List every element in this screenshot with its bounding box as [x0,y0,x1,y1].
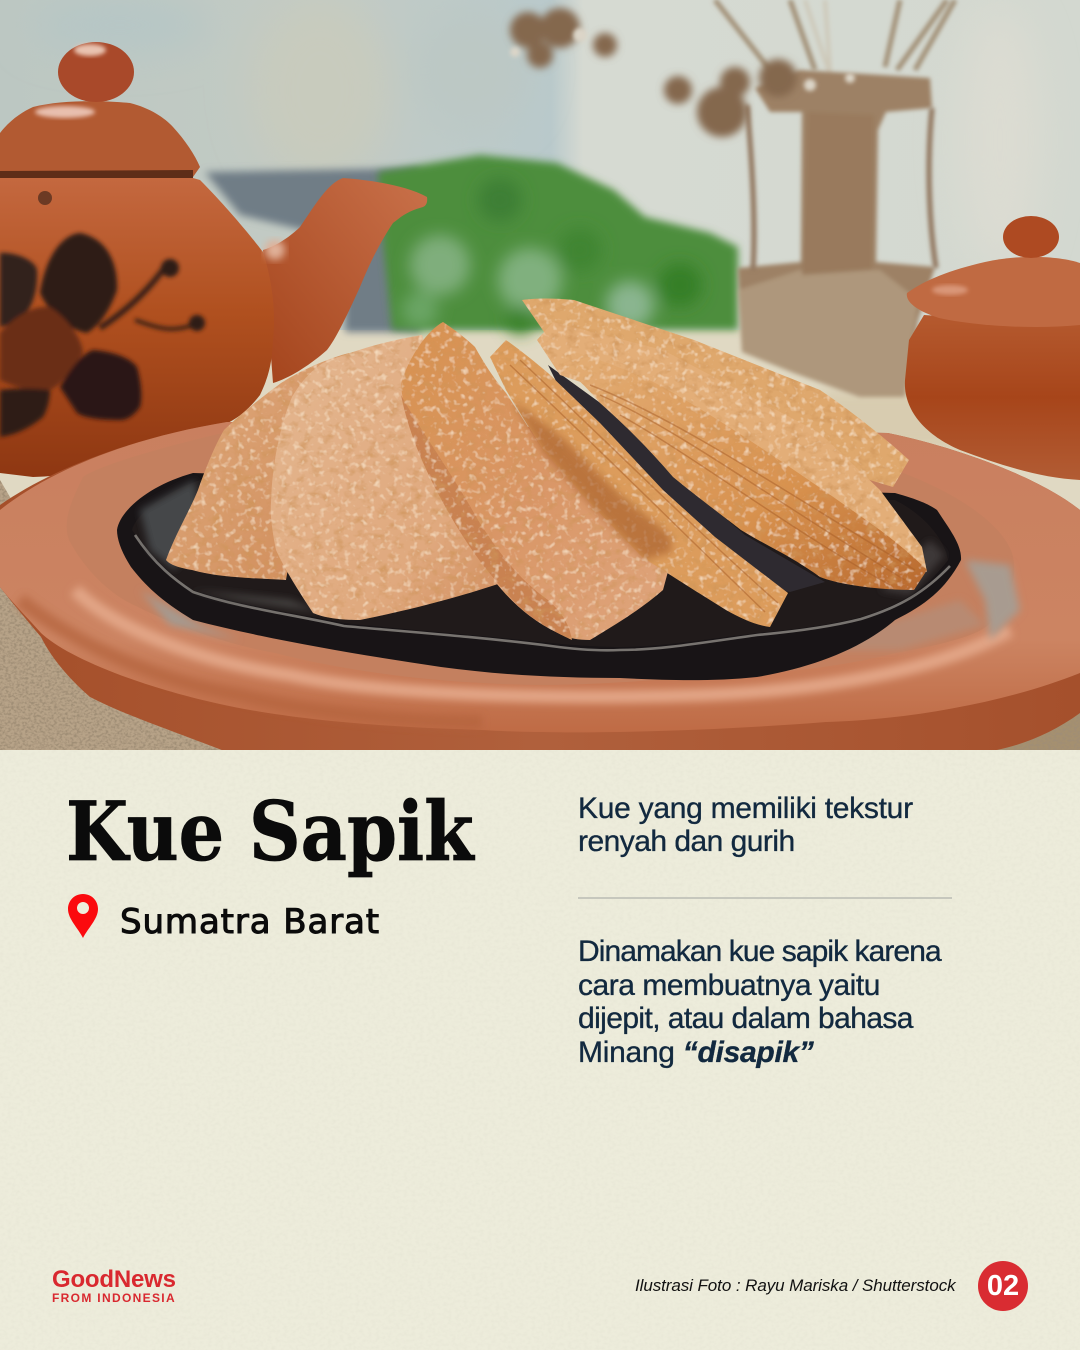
description two: cara membuatnya yaitu [578,969,880,1002]
page number badge: 02 [987,1270,1019,1302]
description one [578,792,913,858]
photo credit: Ilustrasi Foto : Rayu Mariska / Shutterstock [635,1276,956,1295]
shadow under pastries [548,365,825,592]
back pastry [522,298,909,487]
divider [578,897,952,899]
second back pastry [537,322,927,572]
pastry layer lines [510,360,915,612]
burlap cloth [0,480,1080,750]
folded strip [401,395,572,640]
layered pastry right [558,350,927,590]
jar with lid on the right [905,216,1080,480]
black dish [117,473,961,680]
woven vase with dried flowers [510,0,955,397]
layered pastry front [490,340,788,627]
photo: kue sapik on terracotta plate with teapot [0,0,1080,750]
large left pastry [271,335,501,620]
background wall [0,0,1080,750]
description two: dijepit, atau dalam bahasa [578,1002,913,1035]
dark stone behind plant [205,168,420,332]
description two: Minang “disapik” [578,1036,814,1069]
shade beside folded pastry [512,400,672,560]
paper grain [0,750,1080,1350]
teapot [0,42,427,477]
teapot flower motif [0,233,205,437]
description two: Dinamakan kue sapik karena [578,935,941,968]
green plant [378,155,738,334]
central folded pastry [401,322,673,640]
far left pastry [166,353,349,580]
terracotta plate [0,422,1080,752]
description one: Kue yang memiliki tekstur [578,792,913,825]
page number badge [978,1261,1028,1311]
description one: renyah dan gurih [578,825,795,858]
location label: Sumatra Barat [120,902,380,942]
kue sapik pastries [166,298,927,640]
logo: GoodNews from Indonesia [52,1266,176,1305]
paper panel [0,750,1080,1350]
logo: GoodNews from Indonesia: FROM INDONESIA [52,1291,176,1305]
location pin icon [68,894,98,938]
wall patches [30,0,1040,270]
title: Kue Sapik [66,785,474,880]
logo: GoodNews from Indonesia: GoodNews [52,1266,176,1293]
description two [578,935,942,1069]
background table [0,330,1080,750]
